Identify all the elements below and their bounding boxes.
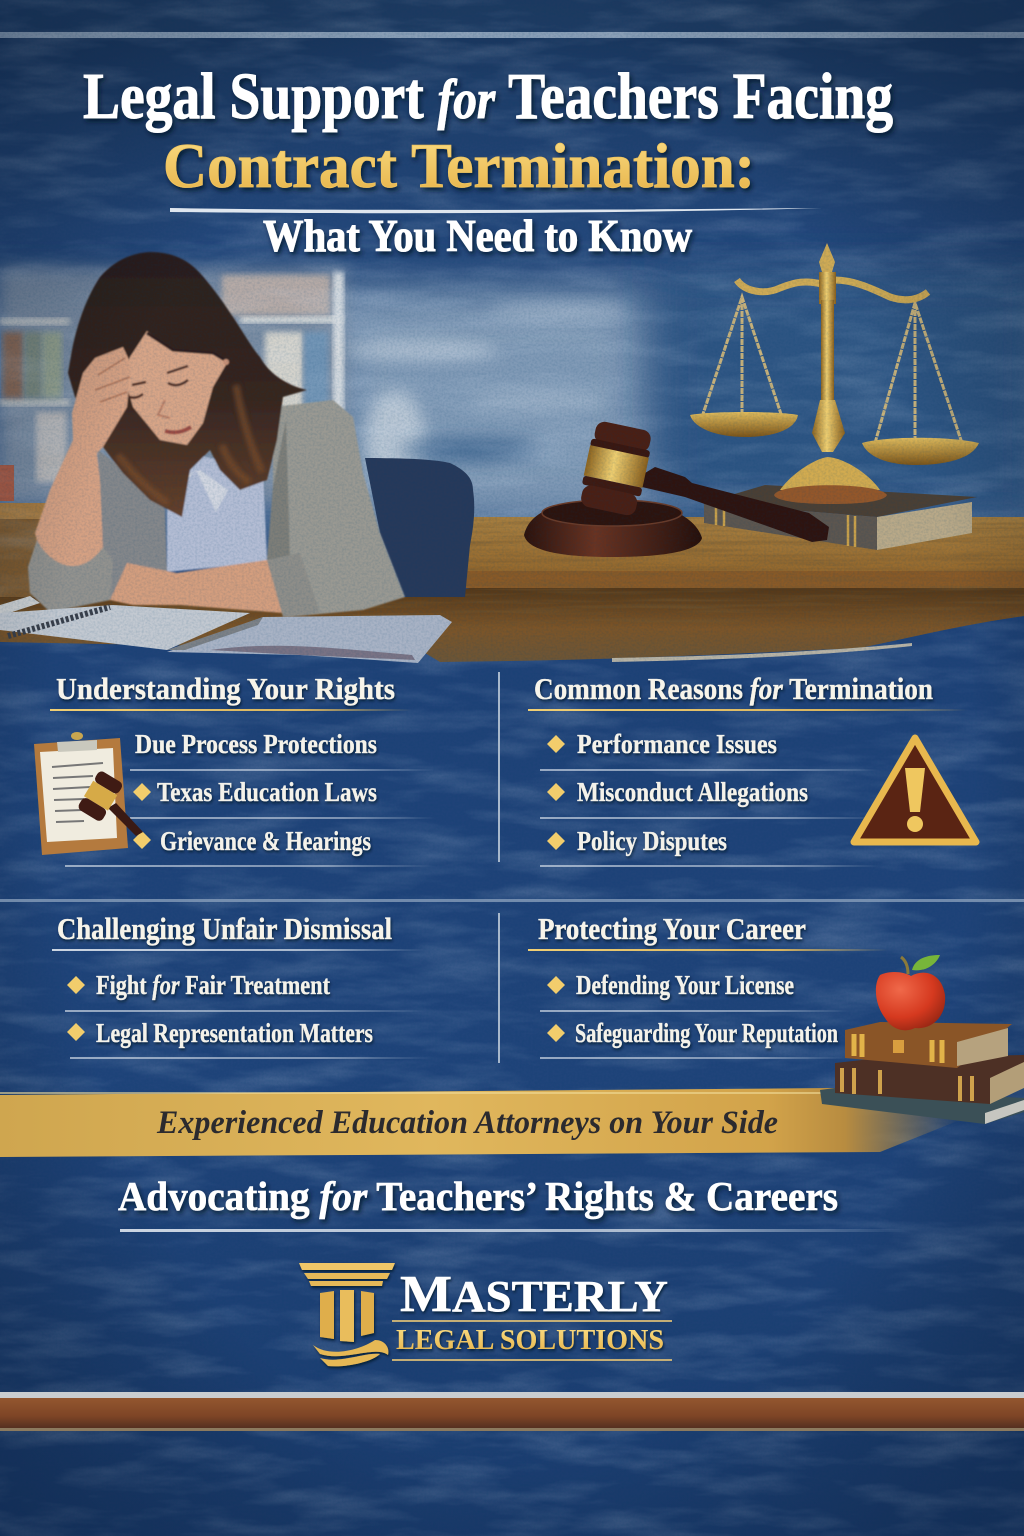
face [123, 331, 227, 445]
list: Grievance & Hearings [160, 826, 371, 856]
banner: experienced attorneys [0, 1088, 960, 1157]
list [540, 970, 850, 1059]
banner: experienced attorneys: Experienced Education Attorneys on Your Side [156, 1105, 778, 1141]
blouse [167, 448, 267, 572]
title underline [170, 208, 822, 213]
logo: masterly legal solutions [299, 1263, 672, 1366]
panel: challenging unfair dismissal [52, 911, 430, 1059]
panel: understanding your rights [34, 671, 435, 867]
heading: Understanding Your Rights [56, 671, 395, 706]
heading: Common Reasons for Termination [534, 671, 933, 706]
title line 1: Legal Support for Teachers Facing [83, 60, 893, 133]
cuff [267, 553, 320, 617]
heading: Protecting Your Career [538, 911, 806, 946]
scales of justice [690, 243, 979, 504]
sleeve [28, 540, 113, 612]
icon: pillar [299, 1263, 395, 1366]
list: Policy Disputes [577, 826, 727, 856]
list: Defending Your License [576, 970, 794, 1000]
divider [498, 913, 500, 1063]
law book [704, 485, 977, 550]
chair [365, 458, 474, 597]
title line 2: Contract Termination: [163, 130, 755, 201]
heading: Challenging Unfair Dismissal [57, 911, 392, 946]
hair [68, 252, 307, 517]
list: Safeguarding Your Reputation [575, 1018, 838, 1048]
icon: warning triangle [854, 738, 976, 842]
list: Fight for Fair Treatment [96, 970, 330, 1000]
forearm and hand on head [35, 347, 130, 585]
subtitle: What You Need to Know [263, 211, 692, 261]
gavel and sound block [524, 420, 829, 557]
cardigan left side [28, 450, 167, 612]
divider [498, 672, 500, 862]
title block [83, 60, 893, 261]
panel: common reasons for termination [528, 671, 976, 867]
list: Due Process Protections [135, 729, 377, 759]
cardigan right side [267, 400, 405, 617]
notebook and papers [0, 596, 452, 663]
footer wood bar [0, 1392, 1024, 1431]
hazy classroom backdrop [0, 270, 1024, 545]
photo scene: woman and legal objects [0, 243, 1024, 663]
icon: apple on books [820, 955, 1024, 1124]
crossed forearm [110, 560, 283, 613]
sub wordmark: LEGAL SOLUTIONS [396, 1325, 664, 1356]
wordmark: MASTERLY [400, 1266, 668, 1323]
bookshelf [0, 268, 345, 597]
icon: clipboard with gavel [34, 732, 143, 855]
divider [0, 899, 1024, 902]
list [540, 729, 880, 867]
woman [28, 252, 405, 617]
panel: protecting your career [528, 911, 888, 1059]
list [65, 729, 435, 867]
wooden desk [0, 517, 1024, 663]
list [65, 970, 430, 1059]
list: Performance Issues [577, 729, 777, 759]
list: Misconduct Allegations [577, 777, 808, 807]
list: Legal Representation Matters [96, 1018, 373, 1048]
tagline: Advocating for Teachers’ Rights & Careers [118, 1173, 838, 1219]
list: Texas Education Laws [157, 777, 377, 807]
